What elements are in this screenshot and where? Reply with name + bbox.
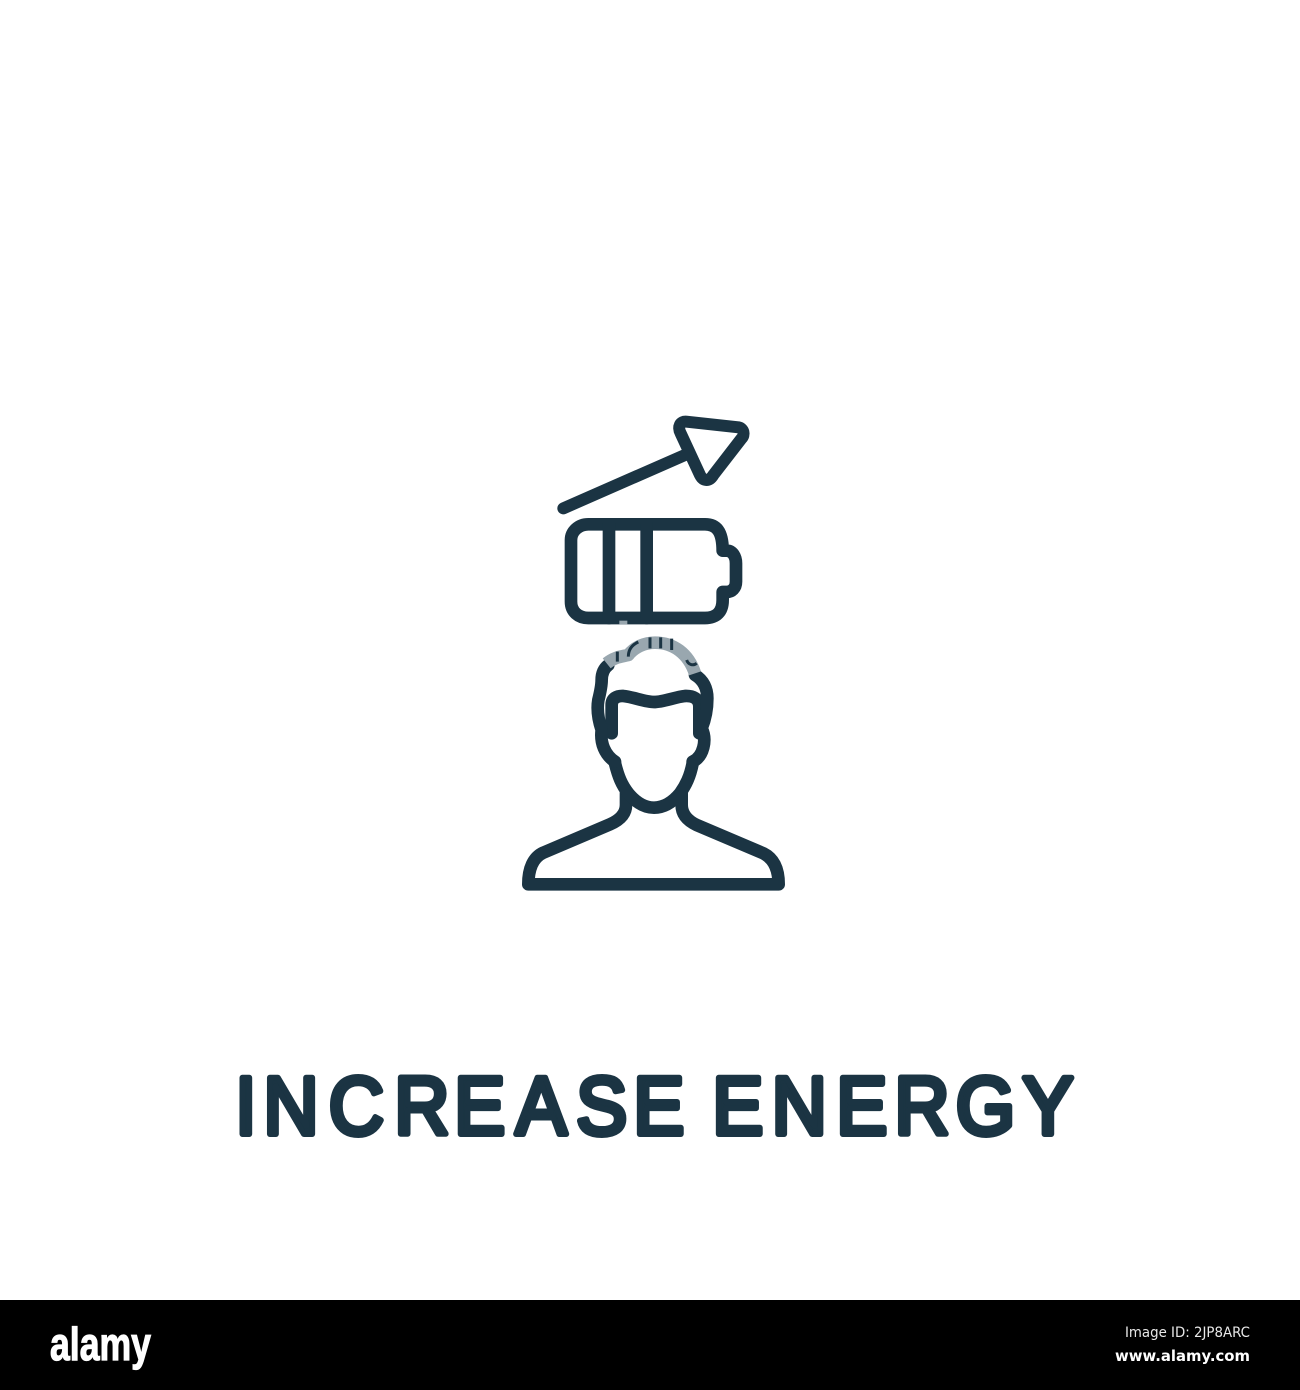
icon: increase energy — [528, 422, 779, 884]
person hair top, faded by watermark — [607, 643, 695, 673]
alamy logo: alamy — [50, 1318, 151, 1370]
image id: Image ID: 2JP8ARC — [1125, 1325, 1250, 1341]
icon: upward arrow — [563, 422, 744, 508]
icon: person — [528, 637, 779, 884]
person shoulders — [528, 793, 779, 884]
title: INCREASE ENERGY — [235, 1059, 1073, 1152]
person face — [612, 696, 699, 733]
icon: battery — [571, 524, 736, 625]
website url: www.alamy.com — [1115, 1347, 1250, 1365]
person ears and hair — [598, 665, 615, 762]
watermark footer bar — [0, 1300, 1300, 1390]
